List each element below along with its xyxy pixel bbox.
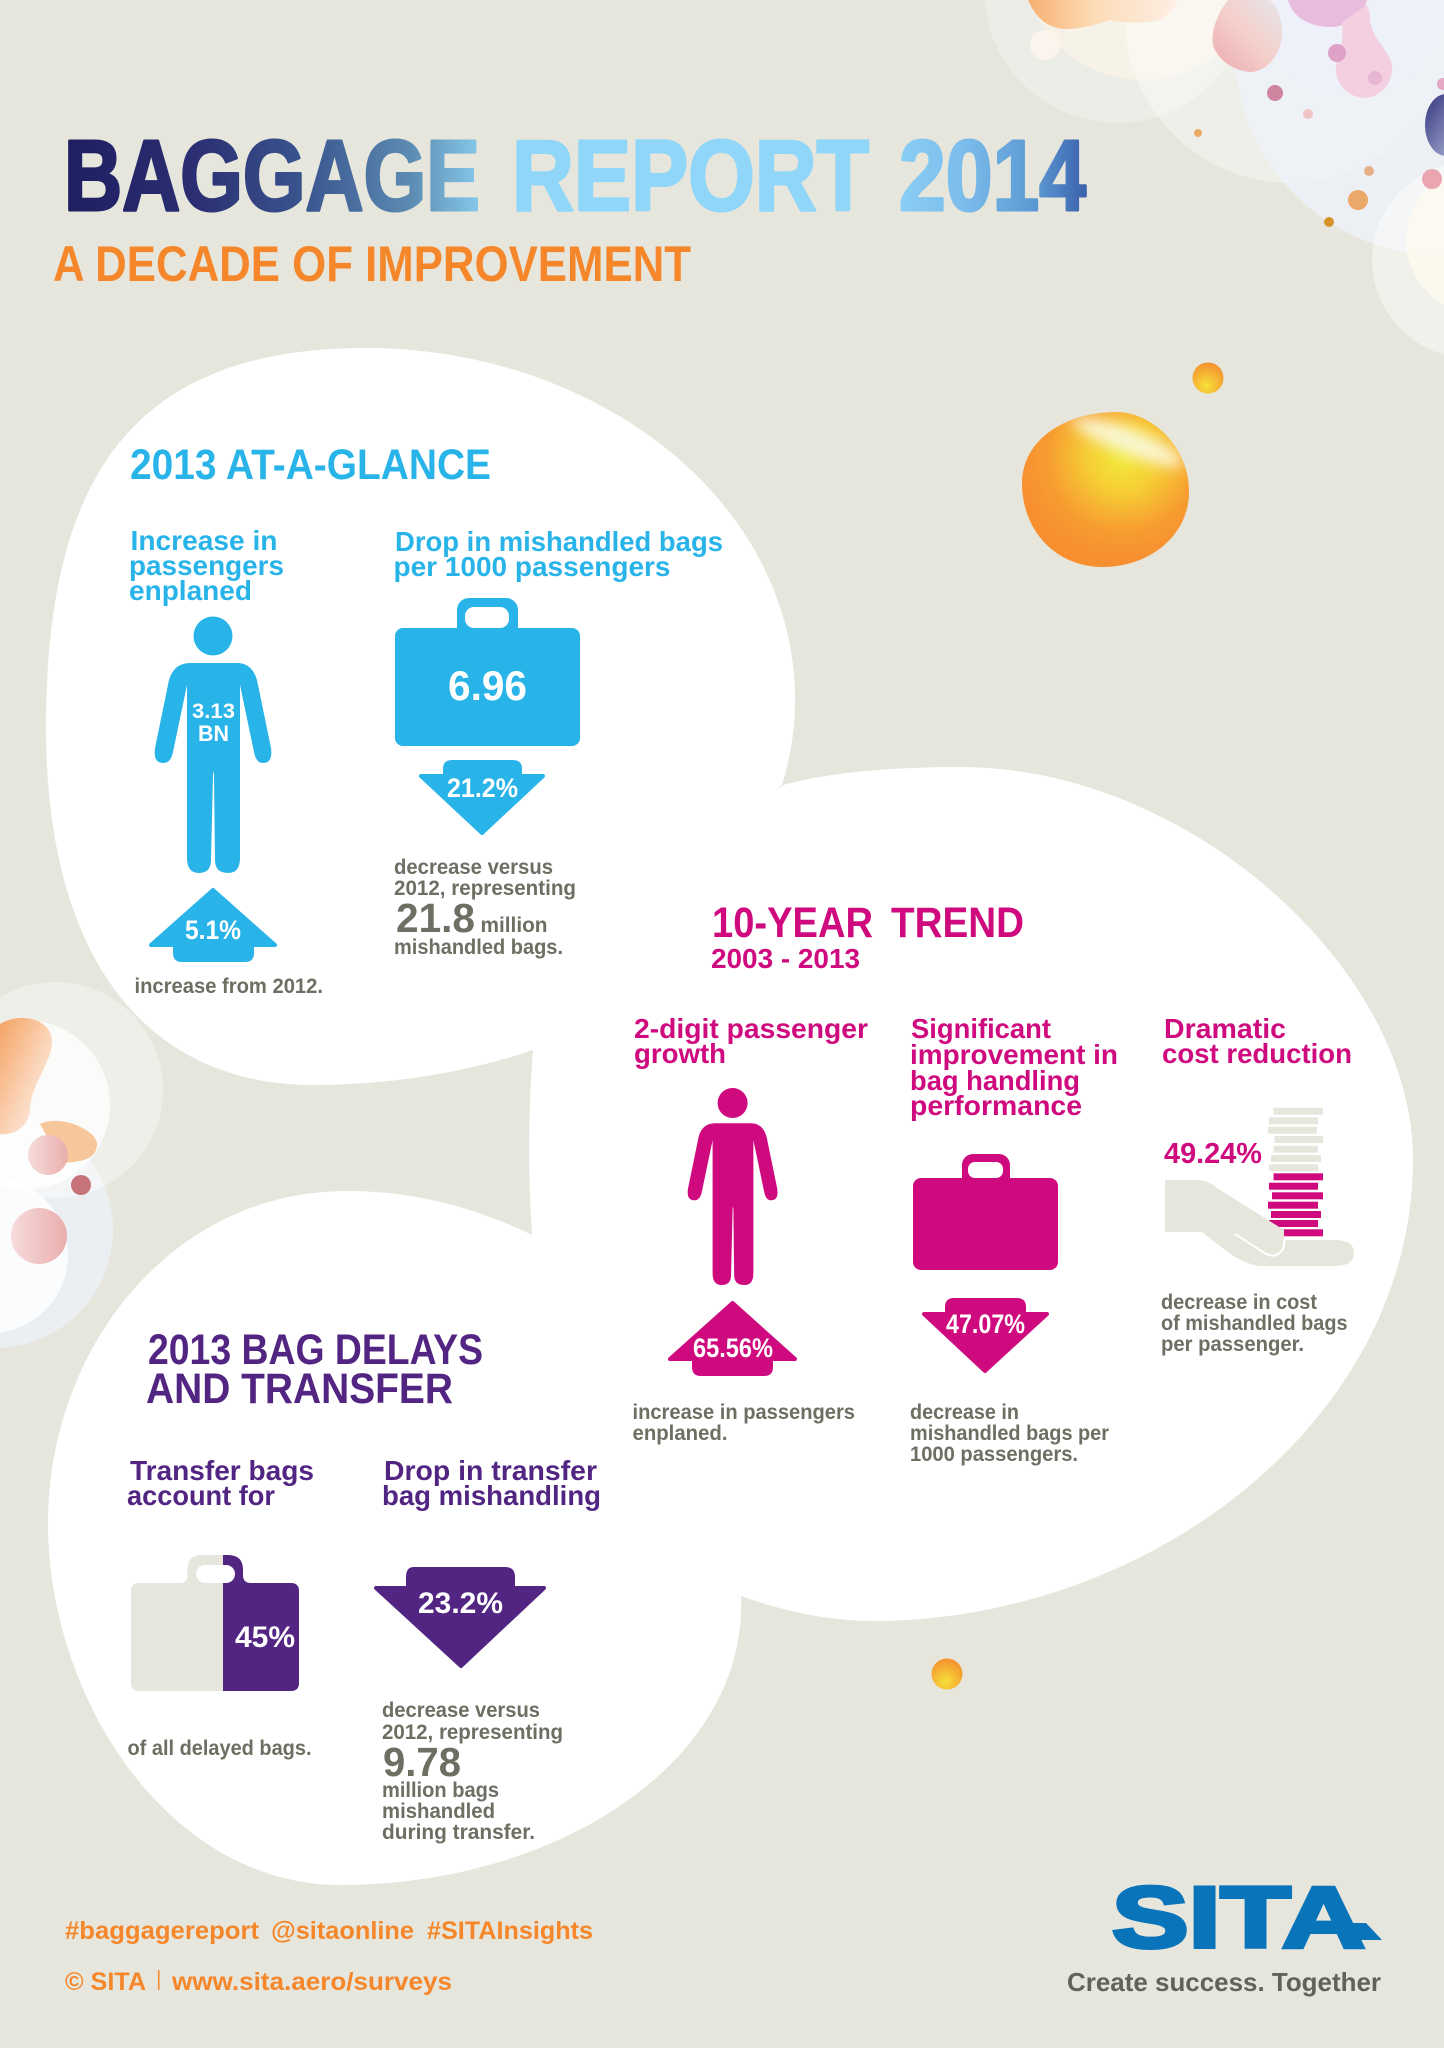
- decorative ball: small orange top: [1192, 362, 1224, 394]
- text: increase in passengers: increase in passengers: [632, 1401, 855, 1424]
- text: cost reduction heading: [1162, 1013, 1352, 1069]
- arrow: down 21.2%: 21.2%: [447, 773, 518, 803]
- footer: copyright and url: www.sita.aero/surveys: [171, 1968, 452, 1996]
- heading: bag delays: AND TRANSFER: [146, 1365, 453, 1413]
- text: bag handling heading: [910, 1013, 1118, 1121]
- text: drop in transfer heading: [382, 1455, 601, 1511]
- title: REPORT: [512, 120, 869, 232]
- text: 49.24%: 49.24%: [1164, 1138, 1262, 1170]
- title: [64, 120, 1086, 232]
- text: transfer decrease description: 2012, representing: [382, 1721, 563, 1744]
- icon: split suitcase 45%: 45%: [235, 1621, 295, 1654]
- text: decrease in cost: [1161, 1291, 1348, 1356]
- text: passenger growth heading: 2-digit passenger: [634, 1013, 868, 1044]
- subtitle: A DECADE OF IMPROVEMENT: [53, 236, 691, 292]
- panel: 2013 at-a-glance: [46, 348, 795, 1085]
- text: passengers heading: [129, 525, 284, 606]
- footer: copyright and url: [65, 1968, 452, 1996]
- text: passenger growth heading: growth: [634, 1038, 726, 1069]
- text: transfer decrease description: million bags: [382, 1779, 499, 1802]
- logo: tagline: Create success. Together: [1067, 1967, 1381, 1997]
- heading: 10-year trend: TREND: [891, 899, 1024, 947]
- text: mishandled description: 21.8: [396, 895, 475, 941]
- text: decrease in mishandled bags: [910, 1401, 1109, 1466]
- arrow: down 47.07%: 47.07%: [946, 1309, 1025, 1339]
- text: transfer decrease description: [382, 1699, 563, 1844]
- text: passengers heading: passengers: [129, 550, 284, 581]
- text: cost reduction heading: Dramatic: [1164, 1013, 1286, 1044]
- arrow: down 21.2%: [421, 762, 543, 833]
- arrow: up 5.1%: 5.1%: [185, 915, 241, 945]
- text: transfer decrease description: decrease versus: [382, 1699, 540, 1722]
- arrow: down 47.07%: [924, 1300, 1047, 1371]
- text: mishandled heading: per 1000 passengers: [394, 551, 670, 582]
- text: increase in passengers: [632, 1401, 855, 1445]
- icon: suitcase: [913, 1154, 1058, 1270]
- title: 2014: [899, 120, 1086, 232]
- text: decrease in mishandled bags: decrease in: [910, 1401, 1019, 1424]
- icon: person 3.13 BN: BN: [198, 721, 229, 746]
- logo: SITA: SITA: [1112, 1870, 1365, 1966]
- text: passenger growth heading: [634, 1013, 868, 1069]
- text: mishandled description: million: [480, 914, 548, 937]
- text: decrease in mishandled bags: 1000 passengers.: [910, 1443, 1078, 1466]
- text: bag handling heading: bag handling: [910, 1065, 1080, 1096]
- heading: bag delays: 2013 BAG DELAYS: [148, 1326, 483, 1374]
- text: mishandled description: mishandled bags.: [394, 936, 563, 959]
- text: transfer bags heading: [127, 1455, 314, 1511]
- text: passengers heading: enplaned: [129, 575, 252, 606]
- text: mishandled description: [394, 856, 576, 959]
- text: decrease in mishandled bags: mishandled bags per: [910, 1422, 1109, 1445]
- text: decrease in cost: per passenger.: [1161, 1333, 1304, 1356]
- icon: person 3.13 BN: 3.13: [192, 700, 235, 723]
- icon: hand holding stack of bars: [1165, 1108, 1354, 1266]
- decorative ball: large orange: [1022, 412, 1189, 567]
- text: mishandled heading: [394, 526, 723, 582]
- text: bag handling heading: performance: [910, 1090, 1082, 1121]
- text: drop in transfer heading: Drop in transfer: [384, 1455, 597, 1486]
- panel: 2013 bag delays and transfer: [48, 1191, 741, 1885]
- text: of all delayed bags: of all delayed bags.: [128, 1737, 312, 1760]
- text: mishandled description: decrease versus: [394, 856, 553, 879]
- arrow: up 65.56%: 65.56%: [693, 1333, 773, 1363]
- text: drop in transfer heading: bag mishandling: [382, 1480, 601, 1511]
- icon: suitcase 6.96: [395, 598, 580, 746]
- footer: hashtags: @sitaonline: [271, 1917, 414, 1945]
- text: bag handling heading: improvement in: [910, 1039, 1118, 1070]
- icon: person: [688, 1088, 778, 1285]
- footer: copyright and url: © SITA: [65, 1968, 146, 1996]
- footer: hashtags: #SITAInsights: [427, 1917, 593, 1945]
- icon: person 3.13 BN: [155, 616, 271, 873]
- decorative bubbles top right: [984, 0, 1444, 358]
- text: passengers heading: Increase in: [130, 525, 278, 556]
- arrow: down 23.2%: 23.2%: [418, 1587, 503, 1620]
- text: transfer bags heading: account for: [127, 1480, 275, 1511]
- arrow: down 23.2%: [376, 1569, 544, 1666]
- heading: at-a-glance: 2013 AT-A-GLANCE: [130, 441, 491, 489]
- text: increase in passengers: enplaned.: [632, 1422, 728, 1445]
- text: decrease in cost: of mishandled bags: [1161, 1312, 1348, 1335]
- text: bag handling heading: Significant: [911, 1013, 1051, 1044]
- text: mishandled heading: Drop in mishandled bags: [395, 526, 723, 557]
- text: decrease in cost: decrease in cost: [1161, 1291, 1317, 1314]
- text: increase from 2012: increase from 2012.: [134, 975, 323, 998]
- title: BAGGAGE: [64, 120, 480, 232]
- arrow: up 65.56%: [670, 1303, 795, 1374]
- text: transfer decrease description: mishandled: [382, 1800, 495, 1823]
- text: cost reduction heading: cost reduction: [1162, 1038, 1352, 1069]
- text: transfer decrease description: during transfer.: [382, 1821, 535, 1844]
- footer: hashtags: #baggagereport: [65, 1917, 260, 1945]
- text: transfer bags heading: Transfer bags: [130, 1455, 314, 1486]
- icon: suitcase 6.96: 6.96: [448, 662, 527, 709]
- text: mishandled description: 2012, representing: [394, 877, 576, 900]
- footer: hashtags: [65, 1917, 593, 1945]
- panel: 10-year trend: [529, 767, 1413, 1621]
- arrow: up 5.1%: [151, 890, 275, 960]
- decorative ball: small orange bottom: [932, 1658, 962, 1690]
- heading: bag delays: [146, 1326, 483, 1413]
- icon: split suitcase 45%: [131, 1555, 299, 1691]
- decorative bubbles left: [0, 982, 163, 1348]
- heading: 10-year trend: [711, 899, 1024, 974]
- heading: 10-year trend: 10-YEAR: [712, 899, 873, 947]
- heading: 10-year trend: 2003 - 2013: [711, 943, 860, 974]
- text: transfer decrease description: 9.78: [383, 1739, 461, 1785]
